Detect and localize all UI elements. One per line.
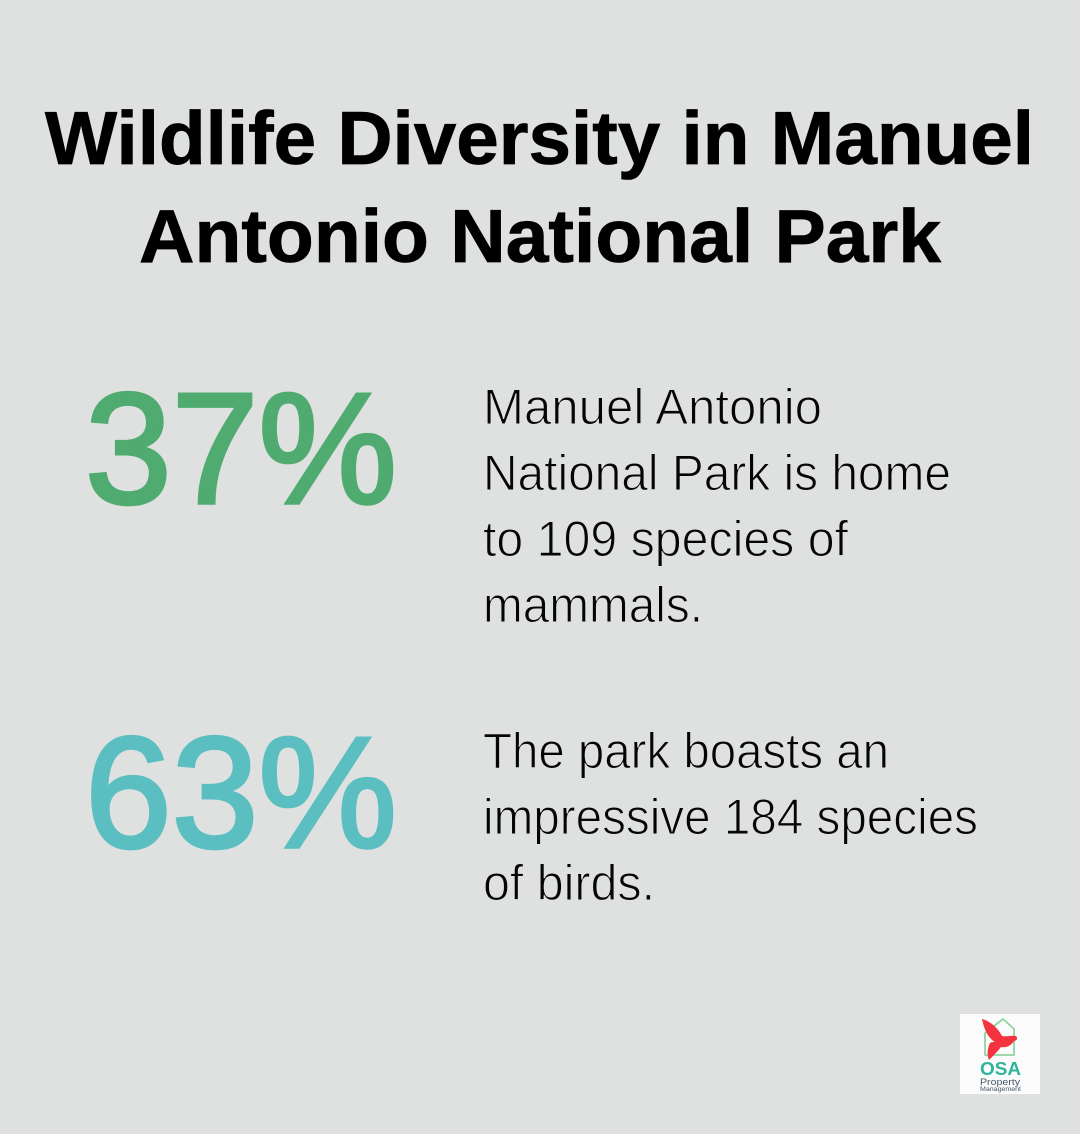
text block: birds: The park boasts an xyxy=(483,723,889,779)
text block: mammals: to 109 species of xyxy=(483,511,848,567)
text block: mammals: mammals. xyxy=(483,577,703,633)
title: Wildlife Diversity in Manuel xyxy=(45,96,1034,180)
title: Antonio National Park xyxy=(139,194,941,278)
stat: 63%: 63% xyxy=(85,705,397,881)
logo wordmark: OSA xyxy=(980,1059,1021,1079)
text block: birds xyxy=(483,723,978,911)
text block: mammals: Manuel Antonio xyxy=(483,379,822,435)
logo: OSA Property Management xyxy=(960,1014,1040,1094)
text block: birds: of birds. xyxy=(483,855,655,911)
icon: house outline xyxy=(985,1019,1014,1055)
stat: 37%: 37% xyxy=(85,361,397,537)
text block: mammals xyxy=(483,379,951,633)
title xyxy=(45,96,1034,278)
text block: mammals: National Park is home xyxy=(483,445,951,501)
logo subtitle small: Management xyxy=(980,1087,1021,1093)
icon: red bird xyxy=(982,1019,1017,1060)
logo subtitle: Property xyxy=(980,1077,1020,1088)
text block: birds: impressive 184 species xyxy=(483,789,978,845)
